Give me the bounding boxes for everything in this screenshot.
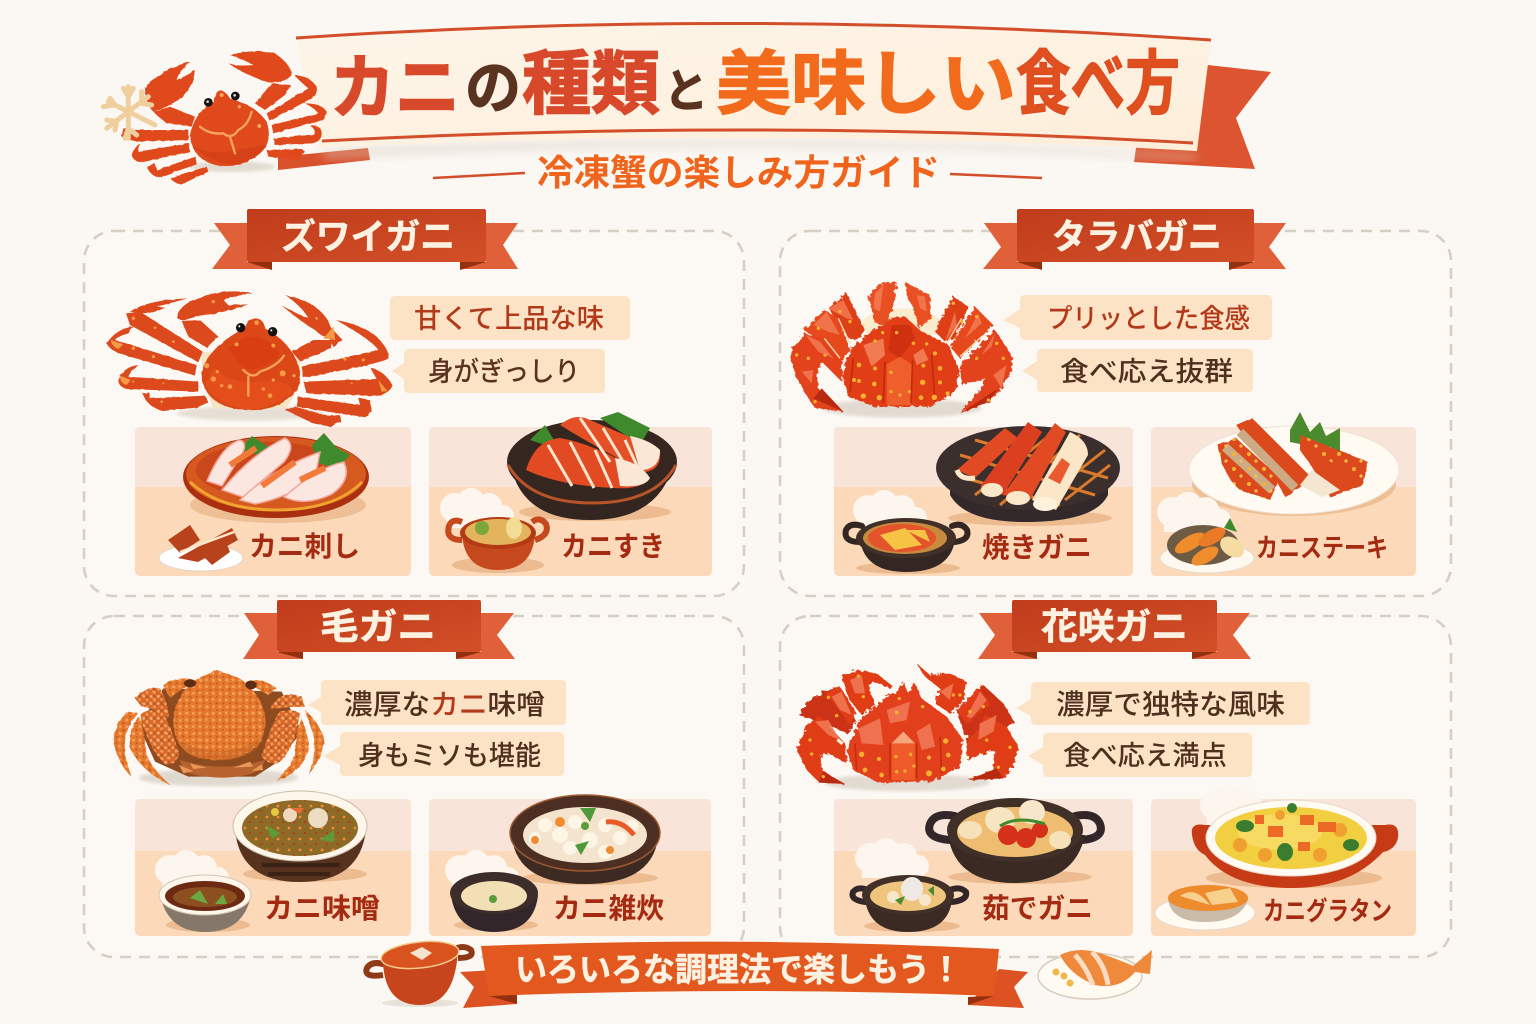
icon: pot (366, 938, 472, 1007)
feature bubble: 甘くて上品な味: 甘くて上品な味 (414, 304, 604, 334)
card: 焼きガニ (834, 422, 1133, 576)
ribbon tail: right (1134, 65, 1271, 169)
feature bubble: 食べ応え満点 (1028, 733, 1252, 777)
card: カニ雑炊 (429, 795, 711, 936)
title text: 食べ方 (1016, 45, 1180, 123)
label: カニ雑炊: カニ雑炊 (553, 893, 664, 924)
title text: 美味しい (716, 45, 1016, 123)
title text: 種類 (522, 45, 660, 123)
feature bubble: プリッとした食感: プリッとした食感 (1047, 304, 1250, 334)
title text (330, 45, 1180, 127)
label: カニ味噌: カニ味噌 (264, 893, 380, 924)
section ribbon: ズワイガニ: ズワイガニ (281, 217, 455, 257)
panel: 毛ガニ (84, 616, 744, 957)
title text: カニ (330, 49, 460, 127)
feature bubble: 濃厚で独特な風味: 濃厚で独特な風味 (1056, 689, 1285, 720)
dish: カニ雑炊 steam and small bowl (445, 850, 538, 932)
feature bubble: 食べ応え満点: 食べ応え満点 (1063, 741, 1227, 771)
dish: 焼きガニ steam and pot (846, 490, 968, 574)
crab illustration: タラバガニ (790, 282, 1012, 418)
section ribbon: タラバガニ: タラバガニ (1052, 218, 1222, 257)
icon: header crab with snowflake (103, 51, 327, 184)
title banner (278, 23, 1271, 170)
panel: 花咲ガニ (780, 616, 1451, 957)
panel: ズワイガニ (84, 231, 744, 596)
footer ribbon (460, 942, 1028, 1008)
dish: 焼きガニ grill (936, 422, 1120, 526)
label: カニすき: カニすき (561, 531, 665, 562)
card: カニ味噌 (135, 791, 411, 936)
feature bubble: 濃厚で独特な風味 (1016, 682, 1310, 725)
dish: カニ刺し plate (183, 433, 369, 523)
section ribbon: ズワイガニ (212, 209, 518, 270)
dish: カニステーキ plate (1189, 412, 1399, 516)
dish: カニステーキ steam and plate (1157, 492, 1254, 573)
card: カニステーキ (1151, 412, 1416, 576)
label: 茹でガニ: 茹でガニ (982, 893, 1093, 924)
dish: カニすき steam and pot (440, 488, 547, 573)
label: カニ刺し: カニ刺し (249, 531, 360, 562)
subtitle: 冷凍蟹の楽しみ方ガイド (537, 152, 940, 193)
section ribbon: 毛ガニ: 毛ガニ (320, 606, 436, 647)
feature bubble: 食べ応え抜群: 食べ応え抜群 (1060, 357, 1233, 387)
label: 焼きガニ: 焼きガニ (982, 532, 1092, 563)
card: カニグラタン (1151, 785, 1416, 936)
section ribbon: 花咲ガニ (978, 600, 1251, 659)
dish: 茹でガニ pot (929, 798, 1101, 884)
feature bubble: 濃厚なカニ味噌: 濃厚なカニ味噌 (344, 689, 545, 720)
feature bubble: 身もミソも堪能 (323, 732, 564, 776)
dish: カニ刺し side plate (159, 525, 243, 571)
crab illustration: 毛ガニ (113, 670, 324, 786)
crab illustration: 花咲ガニ (797, 663, 1018, 791)
feature bubble: 身がぎっしり: 身がぎっしり (428, 357, 580, 387)
feature bubble: 身がぎっしり (392, 349, 605, 393)
panel: タラバガニ (780, 231, 1451, 596)
feature bubble: 食べ応え抜群 (1022, 349, 1253, 392)
crab illustration: ズワイガニ (107, 291, 393, 427)
label: カニステーキ: カニステーキ (1256, 533, 1388, 563)
dish: カニ味噌 steam and small bowl (155, 850, 251, 932)
icon: plate with fish (1038, 950, 1152, 999)
card: カニすき (429, 412, 712, 576)
title text: と (664, 65, 708, 117)
feature bubble: 身もミソも堪能: 身もミソも堪能 (358, 741, 541, 771)
dish: 茹でガニ steam and small pot (852, 838, 966, 932)
section ribbon: タラバガニ (983, 209, 1286, 270)
dish: カニグラタン gratin (1192, 785, 1398, 888)
dish: カニ雑炊 bowl (510, 795, 660, 885)
feature bubble: 甘くて上品な味 (390, 296, 630, 340)
label: カニグラタン: カニグラタン (1263, 896, 1392, 926)
dish: カニすき bowl (507, 412, 677, 521)
card: 茹でガニ (834, 798, 1133, 936)
dish: カニ味噌 bowl (233, 791, 367, 882)
subtitle (433, 152, 1042, 193)
feature bubble: プリッとした食感 (1003, 295, 1272, 340)
ribbon tail: left (278, 148, 370, 170)
footer ribbon: いろいろな調理法で楽しもう！ (515, 951, 962, 988)
section ribbon: 毛ガニ (243, 600, 515, 659)
section ribbon: 花咲ガニ: 花咲ガニ (1041, 606, 1188, 647)
feature bubble: 濃厚なカニ味噌 (308, 680, 566, 725)
card: カニ刺し (135, 427, 411, 576)
title text: の (465, 56, 521, 121)
dish: カニグラタン side plate (1155, 885, 1255, 930)
